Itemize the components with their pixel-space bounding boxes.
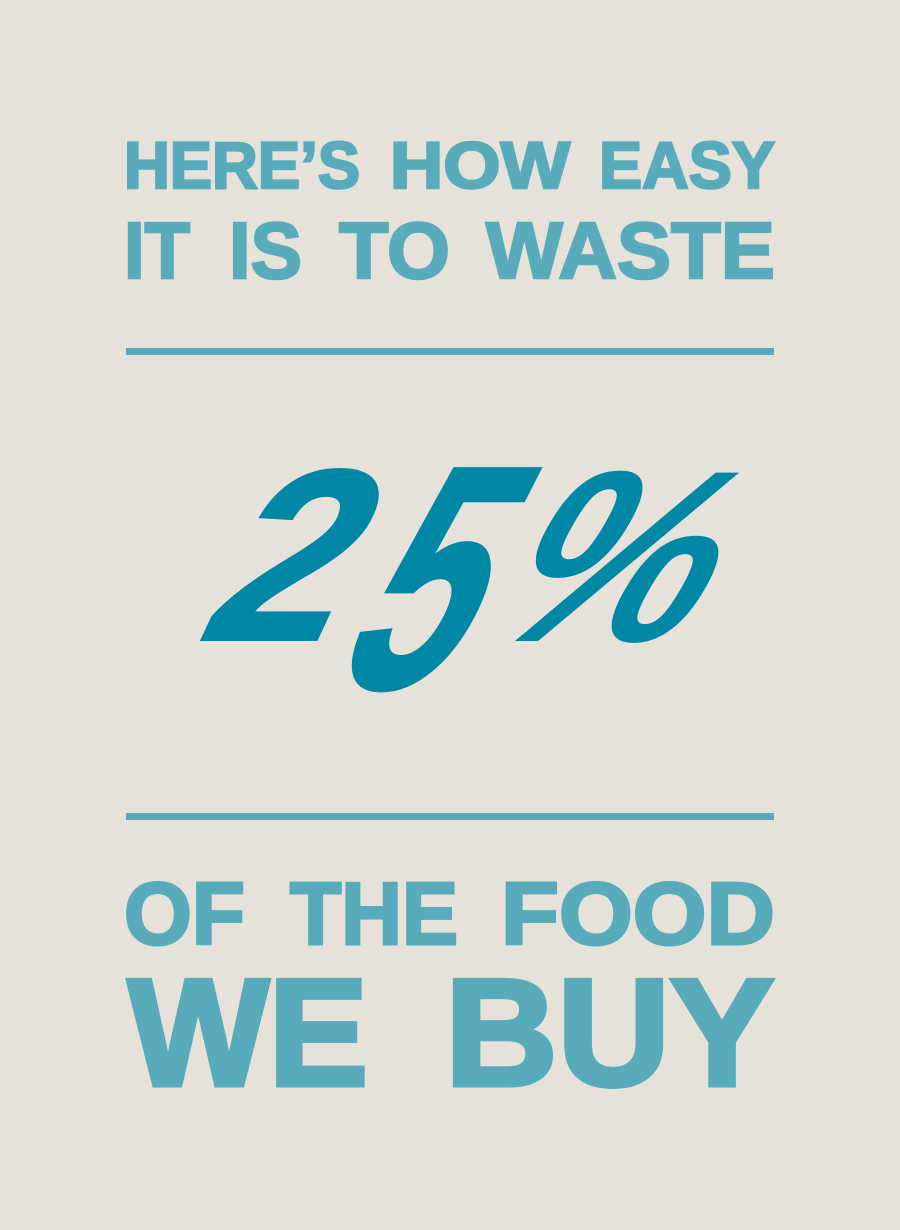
digit 5: 5 (291, 400, 590, 756)
heading line 2: WASTE (486, 206, 775, 295)
heading line 1 (124, 128, 775, 202)
closing line 2: BUY (445, 948, 774, 1118)
percent sign: % (446, 420, 809, 693)
heading line 2: IT (124, 206, 190, 295)
closing line 2 (128, 948, 774, 1118)
big number: 25% (168, 400, 809, 756)
heading line 2 (124, 206, 775, 295)
closing line 1: OF (124, 864, 245, 963)
closing line 1 (124, 864, 775, 963)
closing line 1: THE (290, 864, 458, 963)
heading line 1: HERE’S (124, 128, 360, 202)
closing statement: of the food we buy (124, 864, 775, 1118)
closing line 2: WE (128, 948, 368, 1118)
heading line 2: IS (229, 206, 302, 295)
heading line 2: TO (339, 206, 450, 295)
heading: here's how easy it is to waste (124, 128, 775, 295)
digit 2: 2 (168, 420, 429, 693)
heading line 1: EASY (599, 128, 775, 202)
heading line 1: HOW (390, 128, 571, 202)
closing line 1: FOOD (501, 864, 775, 963)
